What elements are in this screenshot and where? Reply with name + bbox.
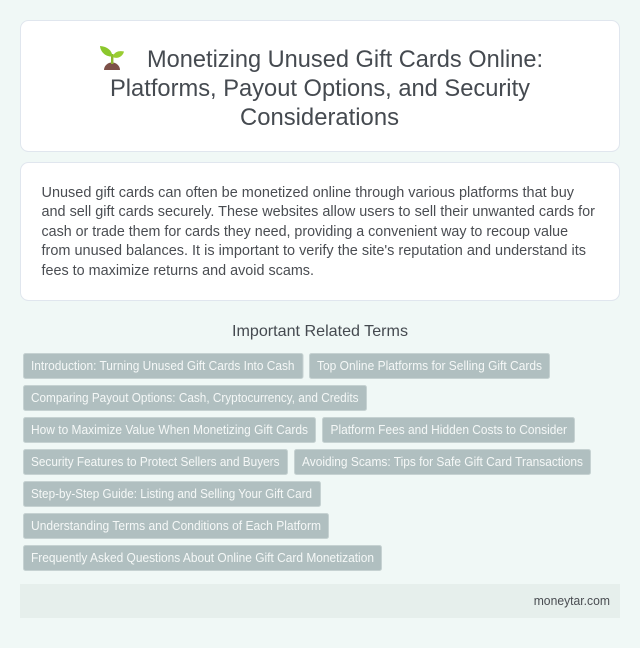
tag — [294, 450, 590, 474]
tag: Platform Fees and Hidden Costs to Consider — [330, 423, 567, 437]
heading: important related terms: Important Related Terms — [232, 323, 408, 340]
tag: Introduction: Turning Unused Gift Cards Into Cash — [31, 359, 295, 373]
tag — [24, 418, 316, 442]
summary text: fees to maximize returns and avoid scams. — [42, 262, 314, 279]
tag — [24, 514, 328, 538]
tag: How to Maximize Value When Monetizing Gift Cards — [31, 423, 308, 437]
tag: Step-by-Step Guide: Listing and Selling Your Gift Card — [31, 487, 312, 501]
summary text: from unused balances. It is important to verify the site's reputation and understand its — [42, 242, 586, 259]
tag: Top Online Platforms for Selling Gift Cards — [317, 359, 542, 373]
icon: seedling — [100, 46, 124, 70]
footer — [20, 584, 620, 618]
footer: moneytar.com — [534, 593, 610, 608]
tag: Avoiding Scams: Tips for Safe Gift Card Transactions — [302, 455, 583, 469]
title: Platforms, Payout Options, and Security — [110, 75, 531, 102]
tag: Security Features to Protect Sellers and Buyers — [31, 455, 280, 469]
tag: Understanding Terms and Conditions of Each Platform — [31, 519, 321, 533]
title: Considerations — [240, 104, 399, 131]
tag — [24, 450, 288, 474]
panel: title card — [20, 20, 620, 152]
title: Monetizing Unused Gift Cards Online: — [147, 46, 543, 73]
tag list — [24, 354, 590, 570]
summary text: Unused gift cards can often be monetized online through various platforms that buy — [42, 184, 574, 201]
summary text — [42, 184, 595, 279]
title — [110, 46, 543, 131]
summary text: and sell gift cards securely. These websites allow users to sell their unwanted cards for — [42, 203, 595, 220]
tag: Comparing Payout Options: Cash, Cryptocurrency, and Credits — [31, 391, 358, 405]
tag — [24, 482, 320, 506]
tag — [24, 546, 382, 570]
tag: Frequently Asked Questions About Online Gift Card Monetization — [31, 551, 374, 565]
tag — [24, 386, 366, 410]
tag — [322, 418, 574, 442]
panel: summary card — [20, 162, 620, 300]
summary text: cash or trade them for cards they need, providing a convenient way to recoup value — [42, 223, 568, 240]
tag — [310, 354, 550, 378]
tag — [24, 354, 303, 378]
